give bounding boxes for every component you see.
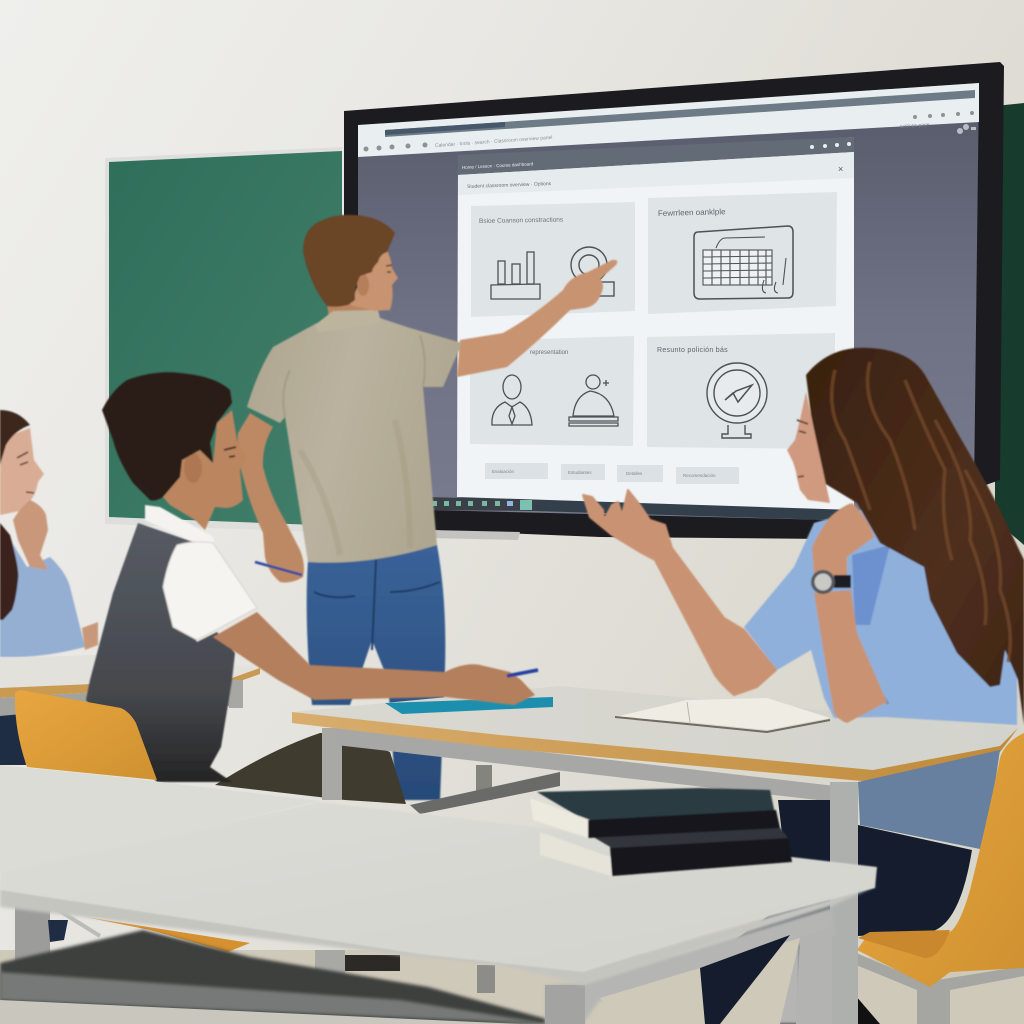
lowered arm [238, 413, 304, 582]
icon: person with tie [492, 375, 532, 425]
hair [303, 215, 395, 307]
floor under rail [0, 1000, 520, 1024]
grey vest [86, 523, 235, 782]
face [350, 252, 398, 311]
blue tablet [385, 697, 553, 714]
pen tray [430, 530, 520, 540]
eye and brow [386, 265, 392, 272]
lower shirt [858, 750, 1000, 850]
screen buttons [485, 463, 739, 484]
eye, brow and lips [17, 452, 34, 493]
dark lower table [0, 930, 565, 1024]
ear [184, 453, 202, 483]
pen [255, 562, 302, 575]
orange edge [292, 712, 1018, 782]
icon: person at desk [569, 375, 618, 426]
corner icons [957, 124, 976, 134]
icon: bar chart [491, 252, 540, 299]
screen buttons: Recomendación [683, 473, 716, 478]
blue shirt [0, 523, 85, 657]
blue shirt [744, 510, 1017, 725]
orange chair, back row [15, 690, 157, 780]
back left desk top [0, 765, 320, 872]
shoe [855, 995, 880, 1024]
desk legs [322, 728, 560, 814]
hair [0, 410, 30, 465]
shadow foot [48, 920, 68, 942]
hair strands [832, 362, 1010, 662]
display bezel [344, 62, 1004, 539]
second left pair [545, 985, 585, 1024]
left table leg [15, 900, 50, 1024]
panel: calendar [648, 192, 837, 314]
left student's dark trousers [0, 714, 26, 765]
slate strip under window [457, 497, 854, 520]
dark trousers [700, 800, 972, 1024]
hair [806, 348, 1024, 725]
right desk leg [830, 782, 858, 1024]
app window: × [838, 164, 843, 174]
front desk top [0, 802, 877, 972]
chair seat [858, 930, 950, 958]
panel: charts: Bsioe Coanson constractions [479, 217, 564, 225]
panel: people [470, 336, 634, 446]
hand on chin [13, 500, 48, 570]
gesturing arm [583, 490, 776, 695]
front desks [0, 765, 877, 1024]
back panel below frame [600, 938, 800, 1024]
wristwatch [811, 570, 851, 594]
desk top [292, 686, 1018, 770]
panel: clock: Resunto polición bás [657, 347, 728, 354]
app window [457, 137, 854, 510]
middle desk [215, 686, 1018, 814]
front desk frame [545, 907, 835, 1024]
front desk rim [0, 885, 877, 985]
face and neck [163, 410, 247, 530]
rear-left trousers [700, 935, 790, 1024]
right student's lower body and chair [700, 733, 1024, 1024]
floor [0, 950, 1024, 1024]
panel: calendar: Fewrrleen oanklple [658, 207, 726, 218]
browser toolbar: Calendar · tools · search · Classroom overview panel [435, 135, 553, 149]
left student [0, 410, 98, 657]
icon: round dial [707, 363, 767, 438]
icon: calendar grid [694, 226, 793, 299]
chair under desk [85, 917, 250, 952]
collar [315, 310, 381, 332]
trousers behind desk [215, 733, 406, 804]
screen buttons: Evaluación [492, 469, 515, 474]
app window: Student classroom overview · Options [467, 181, 552, 190]
chair rail [55, 908, 100, 936]
icon: target [571, 247, 614, 296]
screen buttons: Estudiantes [568, 470, 592, 475]
hand near chin [812, 503, 874, 576]
orange chair [857, 733, 1024, 987]
face [0, 428, 44, 515]
white shirt collar [145, 505, 215, 545]
panel: clock [647, 333, 835, 449]
raised forearm [814, 590, 887, 723]
interactive display [344, 62, 1004, 540]
eye and brow [224, 447, 236, 457]
right student [583, 348, 1024, 725]
neck [327, 300, 378, 328]
grey table rail [0, 972, 550, 1024]
taskbar [428, 497, 535, 511]
polo shirt [247, 317, 462, 563]
screen buttons: Detalles [626, 471, 643, 476]
panel: charts [471, 202, 635, 317]
left desk [0, 655, 260, 718]
pen in hand [507, 670, 538, 676]
browser toolbar: settings page [900, 122, 930, 130]
screen [358, 83, 979, 520]
white shirt sleeve [163, 542, 257, 640]
raised arm with pointing hand [457, 260, 617, 377]
right leg front [796, 926, 832, 1024]
floor-level legs [315, 950, 495, 993]
green chalkboard, left [105, 147, 342, 533]
chair frame [856, 953, 1024, 1024]
stack of dark books [530, 788, 792, 876]
standing student [238, 215, 617, 800]
hand on desk [82, 622, 98, 650]
hair lock [0, 523, 18, 620]
ear [357, 274, 369, 296]
open notebook [615, 698, 830, 732]
app window: Home / Lesson · Course dashboard [462, 161, 534, 170]
jeans [307, 545, 445, 800]
eye and mouth [797, 420, 808, 477]
green chalkboard, right [995, 103, 1024, 545]
browser toolbar [358, 83, 979, 157]
panel: people: representation [530, 350, 568, 356]
face [787, 392, 830, 503]
hair [102, 372, 232, 501]
underside rail [336, 728, 835, 802]
arm [213, 612, 535, 705]
front student [86, 372, 538, 782]
